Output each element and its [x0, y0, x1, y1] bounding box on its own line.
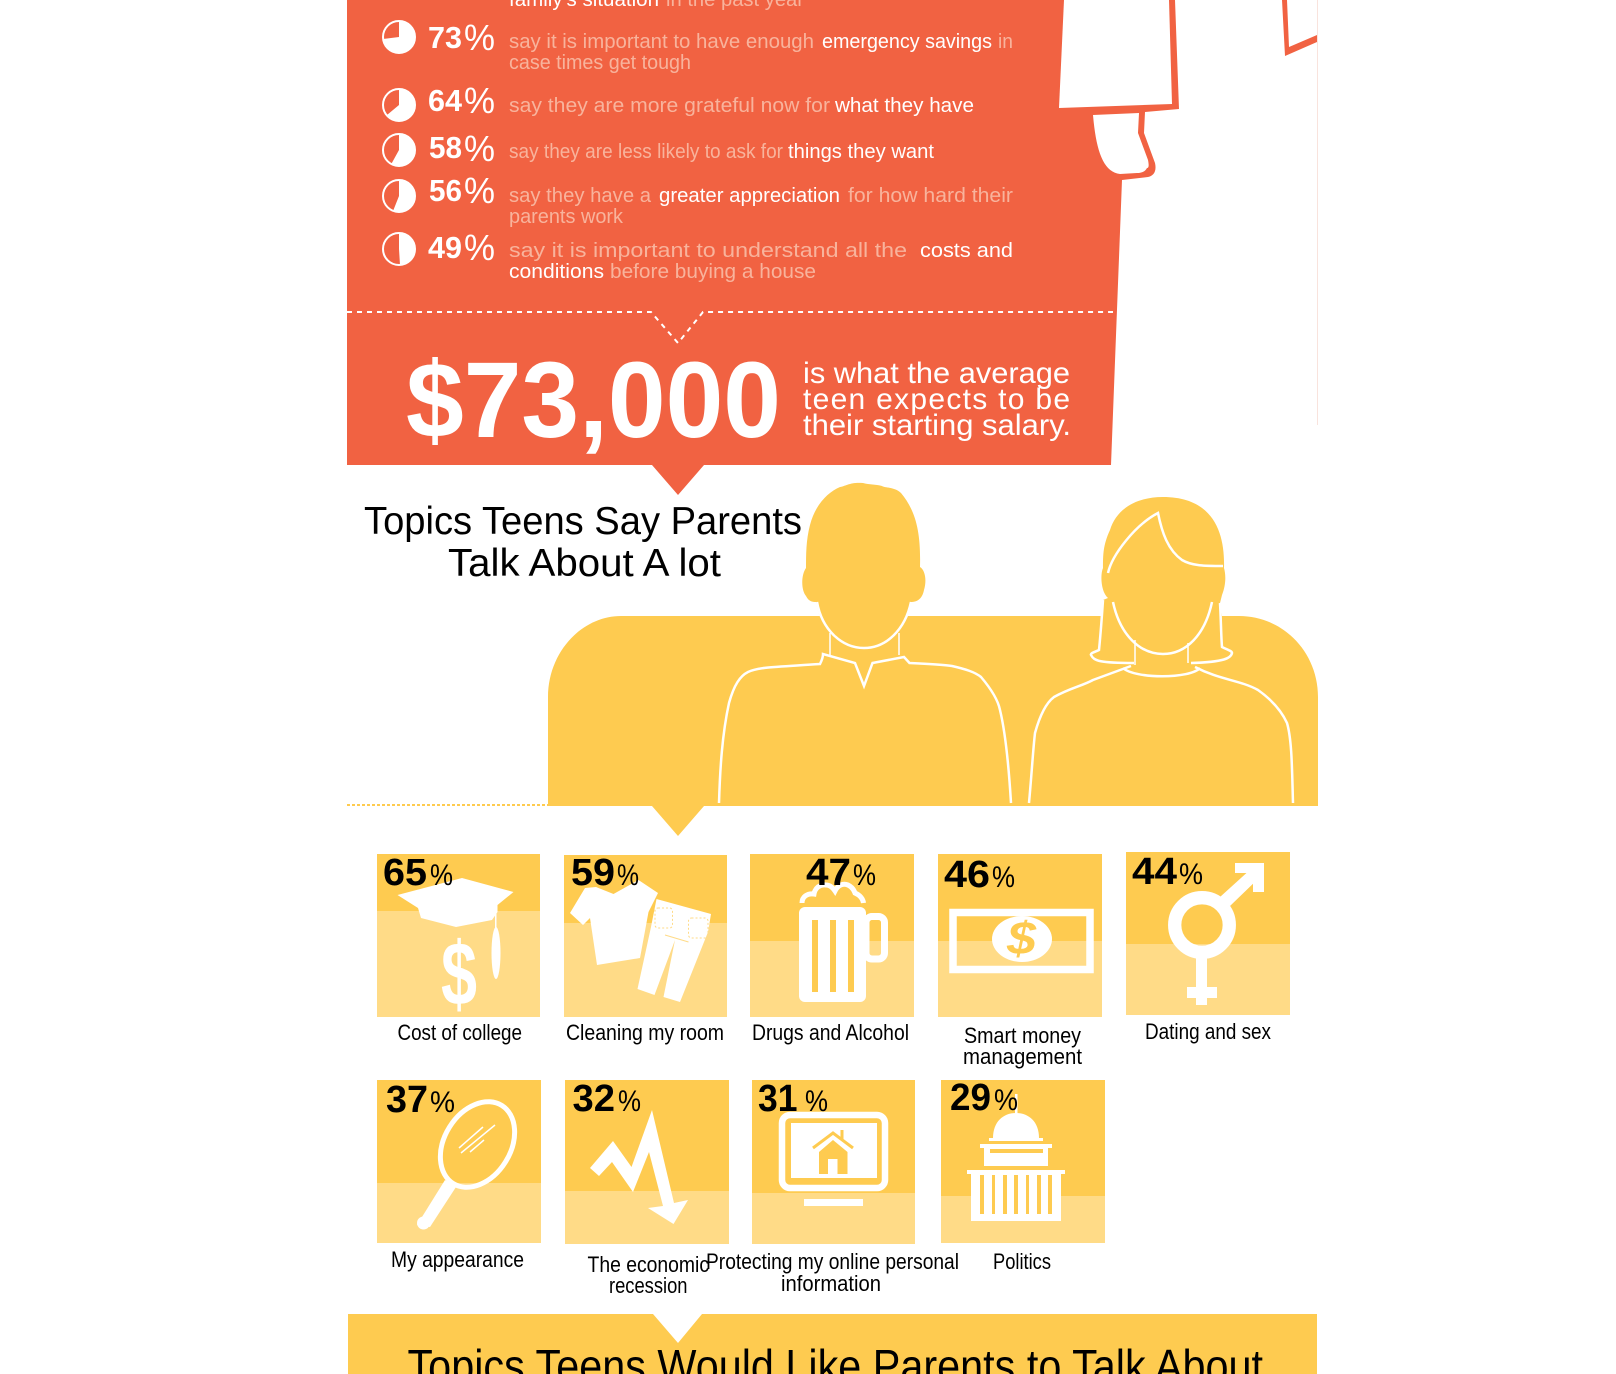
icon: beer mug	[799, 884, 884, 1002]
icon: father	[719, 483, 1011, 803]
card: smart money management: Smart money	[964, 1023, 1081, 1048]
big number: starting salary: $73,000	[406, 339, 781, 460]
heading: topics parents talk about	[364, 500, 802, 585]
card: the economic recession: 32	[572, 1078, 615, 1120]
card: cost of college: %	[430, 859, 453, 892]
stat: 58 percent things they want: 58	[429, 130, 462, 165]
stat: 73 percent emergency savings: case times get tough	[509, 52, 691, 74]
card: my appearance	[377, 1079, 541, 1272]
card: cleaning my room	[564, 852, 727, 1045]
stat: 49 percent costs and conditions	[383, 227, 1013, 283]
stat: 73 percent emergency savings: say it is important to have enough	[509, 31, 814, 53]
stat: 64 percent grateful: what they have	[834, 95, 974, 117]
icon: dollar bill: $	[1006, 912, 1036, 964]
card: my appearance: %	[430, 1086, 455, 1119]
text: starting salary caption: is what the average	[803, 357, 1070, 390]
card: drugs and alcohol: Drugs and Alcohol	[752, 1020, 909, 1045]
panel: orange teen money facts	[347, 0, 1317, 495]
stat: 73 percent emergency savings: in	[998, 31, 1013, 53]
text: starting salary caption: teen expects to be	[803, 383, 1070, 416]
icon: capitol building	[967, 1094, 1065, 1221]
icon: mother	[1029, 497, 1293, 803]
icon: shirt and pants	[570, 880, 711, 1002]
card: dating and sex: Dating and sex	[1145, 1019, 1271, 1044]
card: cleaning my room: 59	[571, 852, 615, 894]
stat: 49 percent costs and conditions: conditions	[509, 261, 604, 283]
stat: family's situation	[509, 0, 804, 11]
stat: 73 percent emergency savings: emergency savings	[822, 31, 992, 53]
stat: 58 percent things they want: things they want	[788, 141, 934, 163]
heading: topics parents talk about: Talk About A lot	[448, 542, 721, 585]
stat: 64 percent grateful	[383, 80, 974, 121]
card: protecting online information: %	[805, 1085, 828, 1118]
card: cost of college	[377, 852, 540, 1045]
stat: 58 percent things they want	[383, 128, 934, 169]
card: cost of college: Cost of college	[398, 1020, 522, 1045]
stat: 58 percent things they want: %	[464, 128, 495, 169]
card: smart money management	[938, 854, 1102, 1069]
card: protecting online information: 31	[758, 1078, 798, 1120]
card: smart money management: management	[963, 1044, 1082, 1069]
card: politics	[941, 1077, 1105, 1274]
card: the economic recession: recession	[609, 1273, 688, 1298]
stat: 73 percent emergency savings: 73	[428, 20, 462, 55]
card: cleaning my room: Cleaning my room	[566, 1020, 724, 1045]
card: protecting online information: information	[781, 1271, 881, 1296]
stat: 56 percent appreciation: 56	[429, 173, 462, 208]
stat: 49 percent costs and conditions: %	[464, 227, 495, 268]
stat: 49 percent costs and conditions: before buying a house	[610, 261, 816, 283]
text: starting salary caption: their starting salary.	[803, 409, 1071, 442]
card: my appearance: My appearance	[391, 1247, 524, 1272]
stat: 73 percent emergency savings: %	[464, 17, 495, 58]
card: politics: Politics	[993, 1249, 1051, 1274]
icon: hand mirror	[417, 1088, 530, 1230]
icon: graduation cap and dollar: $	[441, 925, 477, 1025]
stat: 58 percent things they want: say they are less likely to ask for	[509, 141, 783, 163]
card: dating and sex: 44	[1132, 851, 1177, 893]
card: smart money management: 46	[944, 854, 990, 896]
stat: 56 percent appreciation: parents work	[509, 206, 624, 228]
stat: 49 percent costs and conditions: costs and	[920, 240, 1013, 262]
banner: topics teens would like parents to talk about	[348, 1314, 1317, 1374]
stat: 64 percent grateful: 64	[428, 83, 463, 118]
card: protecting online information: Protecting my online personal	[706, 1249, 959, 1274]
text: starting salary caption	[803, 357, 1071, 442]
card: drugs and alcohol: %	[853, 859, 876, 892]
card: dating and sex	[1126, 851, 1290, 1044]
stat: 56 percent appreciation: greater appreciation	[659, 185, 840, 207]
stat: 49 percent costs and conditions: 49	[428, 230, 462, 265]
stat: 56 percent appreciation	[383, 170, 1013, 228]
card: dating and sex: %	[1179, 858, 1203, 891]
stat: 56 percent appreciation: for how hard their	[848, 185, 1013, 207]
card: cost of college: 65	[383, 852, 427, 894]
card: politics: 29	[950, 1077, 991, 1119]
card: drugs and alcohol	[750, 852, 914, 1045]
card: the economic recession: The economic	[588, 1252, 709, 1277]
card: protecting online information	[706, 1078, 959, 1296]
icon: monitor with house	[782, 1115, 885, 1206]
card: politics: %	[994, 1084, 1018, 1117]
card: drugs and alcohol: 47	[806, 852, 851, 894]
card: smart money management: %	[992, 861, 1015, 894]
stat: 64 percent grateful: say they are more grateful now for	[509, 95, 830, 117]
illustration: white sleeve and hand	[1059, 0, 1317, 174]
card: the economic recession	[565, 1078, 729, 1298]
stat: 49 percent costs and conditions: say it is important to understand all the	[509, 240, 907, 262]
stat: 73 percent emergency savings	[383, 17, 1013, 74]
illustration: yellow parents panel	[347, 483, 1318, 836]
heading: topics parents talk about: Topics Teens Say Parents	[364, 500, 802, 543]
stat: 56 percent appreciation: %	[464, 170, 495, 211]
card: my appearance: 37	[386, 1079, 428, 1121]
icon: dollar bill	[953, 912, 1090, 970]
card: cleaning my room: %	[617, 859, 639, 892]
icon: gender symbols	[1175, 863, 1264, 1005]
card: the economic recession: %	[618, 1085, 641, 1118]
icon: graduation cap and dollar	[398, 878, 514, 1025]
stat: 64 percent grateful: %	[464, 80, 495, 121]
icon: falling arrow	[590, 1110, 688, 1224]
stat: 56 percent appreciation: say they have a	[509, 185, 652, 207]
